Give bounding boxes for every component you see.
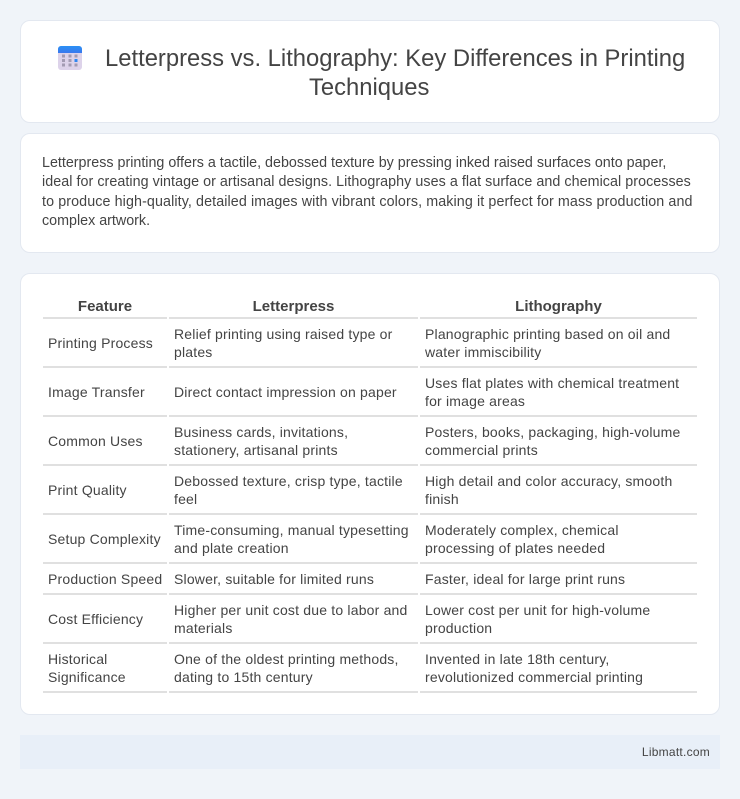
comparison table: One of the oldest printing methods, (174, 651, 399, 667)
comparison table: materials (174, 620, 233, 636)
comparison table: Planographic printing based on oil and (425, 326, 670, 342)
comparison table: feel (174, 491, 197, 507)
comparison table: Relief printing using raised type or (174, 326, 393, 342)
summary text: ideal for creating vintage or artisanal designs. Lithography uses a flat surface and chemical processes (42, 174, 691, 190)
icon: calendar (58, 46, 82, 70)
title: Techniques (309, 74, 429, 101)
comparison table: Business cards, invitations, (174, 424, 348, 440)
comparison table: Print Quality (48, 482, 127, 498)
comparison table: plates (174, 344, 212, 360)
comparison table: Invented in late 18th century, (425, 651, 609, 667)
footer: Libmatt.com (642, 745, 710, 759)
comparison table: stationery, artisanal prints (174, 442, 338, 458)
comparison table: dating to 15th century (174, 669, 313, 685)
summary text: to produce high-quality, detailed images with vibrant colors, making it perfect for mass production and (42, 194, 693, 210)
comparison table: Lithography (515, 298, 602, 315)
comparison table: Slower, suitable for limited runs (174, 571, 374, 587)
comparison table: Moderately complex, chemical (425, 522, 619, 538)
summary text (42, 155, 693, 229)
footer (20, 735, 720, 769)
comparison table: Direct contact impression on paper (174, 384, 397, 400)
comparison table: Lower cost per unit for high-volume (425, 602, 650, 618)
comparison table: revolutionized commercial printing (425, 669, 643, 685)
title: Letterpress vs. Lithography: Key Differences in Printing (105, 45, 685, 72)
panel: comparison table card (20, 273, 720, 715)
panel: summary card (20, 133, 720, 253)
comparison table: Time-consuming, manual typesetting (174, 522, 409, 538)
comparison table: Posters, books, packaging, high-volume (425, 424, 680, 440)
comparison table: Significance (48, 669, 126, 685)
comparison table: and plate creation (174, 540, 289, 556)
comparison table: Debossed texture, crisp type, tactile (174, 473, 403, 489)
comparison table: Cost Efficiency (48, 611, 143, 627)
comparison table: processing of plates needed (425, 540, 605, 556)
comparison table: Common Uses (48, 433, 143, 449)
summary text: complex artwork. (42, 213, 150, 229)
comparison table: water immiscibility (425, 344, 541, 360)
comparison table: High detail and color accuracy, smooth (425, 473, 672, 489)
comparison table: Higher per unit cost due to labor and (174, 602, 408, 618)
comparison table: Feature (78, 298, 132, 315)
comparison table: Image Transfer (48, 384, 145, 400)
comparison table: Printing Process (48, 335, 153, 351)
comparison table: production (425, 620, 492, 636)
title (105, 45, 685, 101)
comparison table: Uses flat plates with chemical treatment (425, 375, 679, 391)
comparison table: finish (425, 491, 459, 507)
comparison table: commercial prints (425, 442, 538, 458)
comparison table: Production Speed (48, 571, 162, 587)
summary text: Letterpress printing offers a tactile, debossed texture by pressing inked raised surfaces onto paper, (42, 155, 666, 171)
comparison table: for image areas (425, 393, 525, 409)
comparison table: Setup Complexity (48, 531, 161, 547)
comparison table (43, 298, 697, 693)
comparison table: Letterpress (253, 298, 334, 315)
comparison table: Faster, ideal for large print runs (425, 571, 625, 587)
panel: title card (20, 20, 720, 123)
comparison table: Historical (48, 651, 107, 667)
